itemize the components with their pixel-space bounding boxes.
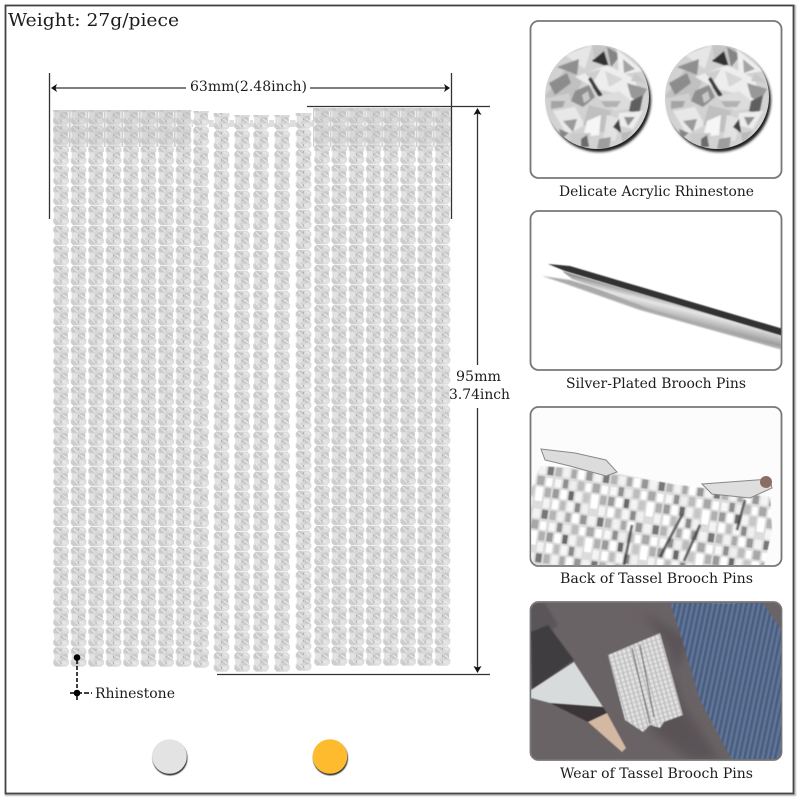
pin dark upper edge	[548, 264, 790, 338]
left tassel columns	[53, 110, 192, 667]
dark gap under sleeve	[531, 625, 574, 690]
rhinestone callout: Rhinestone	[95, 686, 175, 702]
caption: worn brooch: Wear of Tassel Brooch Pins	[560, 766, 753, 782]
tassel brooch rhinestone illustration	[53, 108, 451, 672]
pin head	[760, 476, 772, 488]
rhinestone callout	[70, 654, 175, 702]
colour swatch: gold	[313, 739, 348, 776]
cardigan shading	[652, 620, 714, 759]
left safety pin	[541, 449, 617, 476]
height label: 3.74inch	[449, 387, 510, 403]
width dimension arrow	[50, 73, 452, 219]
dark fabric under window	[550, 703, 607, 722]
caption: brooch pin: Silver-Plated Brooch Pins	[566, 376, 746, 392]
backing bar overlay left	[53, 110, 191, 147]
colour swatch: silver	[152, 739, 188, 776]
caption: rhinestone: Delicate Acrylic Rhinestone	[559, 184, 754, 200]
pin shadow	[542, 276, 790, 352]
caption: back of brooch: Back of Tassel Brooch Pins	[560, 571, 753, 587]
height dimension arrow	[217, 106, 490, 674]
panel: rhinestone	[530, 21, 782, 178]
icon: rhinestone gem right	[665, 45, 771, 152]
cardigan right edge	[763, 603, 781, 628]
right safety pin	[702, 479, 772, 498]
backing bar overlay right	[313, 108, 451, 147]
right tassel columns	[314, 108, 450, 666]
skin	[588, 713, 626, 752]
brooch worn on cardigan	[608, 633, 683, 732]
height label	[449, 369, 510, 403]
width label: 63mm(2.48inch)	[190, 79, 307, 95]
metal tassel back	[531, 466, 772, 566]
panel: brooch pin	[530, 211, 790, 370]
window	[531, 662, 603, 707]
panel: back of brooch	[530, 407, 782, 566]
sweater	[670, 603, 782, 760]
height label: 95mm	[456, 369, 501, 385]
pin silver body	[562, 271, 790, 350]
icon: rhinestone gem left	[545, 45, 651, 152]
weight heading: Weight: 27g/piece	[8, 10, 179, 31]
middle tassel columns	[193, 111, 312, 672]
dark streaks	[624, 500, 745, 565]
panel: worn brooch photo	[530, 602, 782, 760]
